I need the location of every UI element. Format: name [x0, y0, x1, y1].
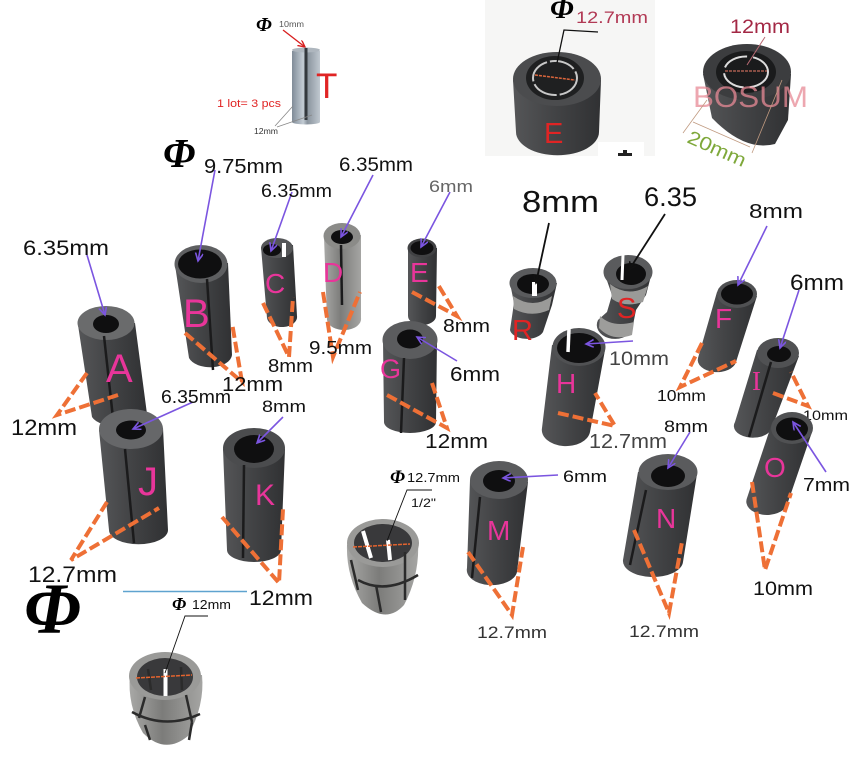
- body: [734, 338, 799, 438]
- bore arrow: [793, 422, 826, 472]
- outer size: 12mm: [425, 431, 488, 453]
- big phi symbol bottom: Φ: [24, 569, 81, 649]
- bore size: 6mm: [790, 270, 844, 295]
- bore arrow: [271, 192, 292, 251]
- body: [347, 519, 419, 615]
- outer size: 9.5mm: [309, 338, 372, 358]
- letter: I: [752, 366, 761, 396]
- diameter line: [725, 70, 767, 72]
- bore size: 6.35mm: [261, 181, 332, 201]
- body: [467, 461, 528, 585]
- outer size: 8mm: [443, 316, 490, 336]
- arrow: bore: [283, 30, 305, 47]
- letter: K: [255, 479, 275, 512]
- nut body: [513, 52, 601, 155]
- collet I: [734, 270, 848, 438]
- bore size: 8mm: [262, 397, 306, 416]
- leader: [387, 490, 432, 541]
- wall dimension: [752, 482, 791, 570]
- wall dimension: [558, 393, 615, 426]
- letter: D: [323, 257, 343, 288]
- collet J: [28, 387, 231, 587]
- wall dimension: [263, 297, 293, 357]
- collet O: [746, 412, 850, 600]
- body: [324, 223, 361, 330]
- bore size: 6mm: [429, 177, 473, 196]
- outer size: 10mm: [657, 388, 706, 405]
- collet G: [380, 321, 500, 453]
- body: [597, 255, 652, 339]
- wall dimension: [323, 292, 360, 357]
- small plus mark: [618, 150, 632, 156]
- outer size: 10mm: [803, 407, 848, 423]
- collet N: [623, 417, 708, 641]
- letter: F: [715, 303, 732, 334]
- bore arrow: [133, 402, 193, 429]
- outer size: 12mm: [222, 374, 283, 396]
- letter: E: [410, 257, 429, 288]
- inch label: 1/2": [411, 496, 436, 510]
- bore arrow: [421, 192, 450, 247]
- quantity note: 1 lot= 3 pcs: [217, 98, 282, 110]
- panel: collet nut with 20mm outer size: [683, 17, 808, 172]
- bore size: 10mm: [609, 349, 669, 370]
- letter: G: [380, 354, 401, 384]
- size label: 12.7mm: [407, 470, 460, 485]
- collet T body: [292, 48, 320, 124]
- collet S: [597, 182, 697, 339]
- wall dimension: [412, 283, 457, 316]
- collet D: [309, 155, 413, 358]
- bore size: 6mm: [450, 364, 500, 386]
- bore size: 6mm: [563, 467, 607, 486]
- outer size: 12mm: [11, 415, 77, 440]
- letter: A: [106, 347, 133, 391]
- diameter line: [136, 675, 192, 678]
- letter: H: [556, 368, 576, 399]
- bore arrow: [257, 417, 283, 443]
- wall dimension: [57, 373, 118, 415]
- bore size: 9.75mm: [204, 156, 283, 178]
- size label: 12mm: [730, 17, 790, 38]
- bore arrow: [668, 432, 690, 468]
- body: [542, 328, 606, 446]
- letter T: T: [316, 67, 337, 106]
- size leader: [747, 37, 765, 65]
- body: [382, 321, 438, 433]
- size label: 12.7mm: [576, 8, 648, 27]
- letter: N: [656, 503, 676, 534]
- body: [78, 306, 147, 427]
- body: [261, 238, 297, 327]
- letter E: E: [544, 118, 563, 150]
- nut body: [703, 44, 791, 146]
- watermark: BOSUM: [693, 81, 808, 114]
- body: [698, 280, 757, 372]
- bore arrow: [198, 170, 215, 261]
- outer size: 12.7mm: [477, 623, 547, 642]
- collet C: [261, 181, 332, 376]
- bore size: 6.35mm: [339, 155, 413, 176]
- body: [510, 268, 557, 339]
- bore arrow: [87, 255, 105, 315]
- bore size: 8mm: [522, 184, 599, 219]
- body: [408, 238, 437, 325]
- bore arrow: [503, 475, 558, 478]
- wall dimension: [71, 502, 159, 560]
- bore arrow: [738, 226, 767, 285]
- letter: M: [487, 515, 510, 546]
- collet F: [657, 201, 803, 405]
- panel: collet nut E photo: [485, 0, 655, 157]
- letter: S: [617, 293, 636, 325]
- phi symbol: Φ: [390, 467, 405, 488]
- body: [174, 245, 232, 370]
- diameter line: [353, 544, 410, 547]
- body: [223, 428, 285, 562]
- letter: C: [265, 268, 285, 299]
- collet H: [542, 328, 669, 453]
- collet B: [174, 156, 283, 396]
- body: [99, 409, 168, 544]
- bore size: 6.35: [644, 182, 697, 212]
- big phi symbol top: Φ: [163, 130, 195, 176]
- outer size: 12mm: [249, 587, 313, 610]
- body: [746, 412, 813, 515]
- body: [129, 652, 202, 745]
- outer size dimension: [683, 80, 782, 153]
- divider line: [123, 590, 247, 592]
- outer size label: 20mm: [684, 127, 749, 172]
- wall dimension: [773, 372, 808, 406]
- bore size label: 10mm: [279, 20, 304, 29]
- wall dimension: [468, 547, 523, 615]
- bore size: 6.35mm: [161, 387, 231, 407]
- collet K: [222, 397, 313, 610]
- letter: R: [512, 315, 533, 347]
- notch: [598, 142, 644, 157]
- bore size: 8mm: [664, 417, 708, 436]
- bore arrow: [780, 290, 799, 348]
- collet E: [408, 177, 490, 336]
- collet 12.7mm grey: [347, 467, 460, 615]
- outer size: 8mm: [268, 356, 313, 376]
- wall dimension: [680, 343, 736, 387]
- bore arrow: [341, 175, 373, 237]
- panel: product T with specification: [217, 14, 337, 136]
- leader: [557, 30, 598, 63]
- outer size leaders: [275, 106, 312, 127]
- phi symbol: Φ: [172, 594, 186, 614]
- outer size: 12.7mm: [629, 622, 699, 641]
- wall dimension: [222, 509, 283, 583]
- bore size: 6.35mm: [23, 237, 109, 260]
- bore arrow: [417, 337, 457, 361]
- wall dimension: [387, 383, 447, 428]
- bore arrow: [536, 223, 549, 283]
- bore size: 7mm: [803, 475, 850, 495]
- outer size: 12.7mm: [28, 562, 117, 587]
- wall dimension: [185, 323, 242, 382]
- outer size: 10mm: [753, 579, 813, 600]
- icon: phi symbol: Φ: [256, 14, 272, 36]
- letter: B: [183, 292, 210, 336]
- collet A: [11, 237, 147, 440]
- letter: O: [764, 452, 786, 483]
- bore arrow: [629, 214, 665, 270]
- bore arrow: [586, 341, 633, 344]
- body: [623, 454, 698, 577]
- size label: 12mm: [192, 597, 231, 612]
- leader: [165, 616, 208, 673]
- outer size label: 12mm: [254, 127, 278, 136]
- collet R: [510, 184, 599, 347]
- wall dimension: [634, 530, 682, 613]
- bore size: 8mm: [749, 201, 803, 223]
- collet 12mm grey: [129, 594, 231, 745]
- collet M: [467, 461, 607, 642]
- outer size: 12.7mm: [589, 431, 667, 453]
- letter: J: [138, 460, 158, 504]
- photo backdrop: [485, 0, 655, 156]
- diameter line: [535, 75, 575, 80]
